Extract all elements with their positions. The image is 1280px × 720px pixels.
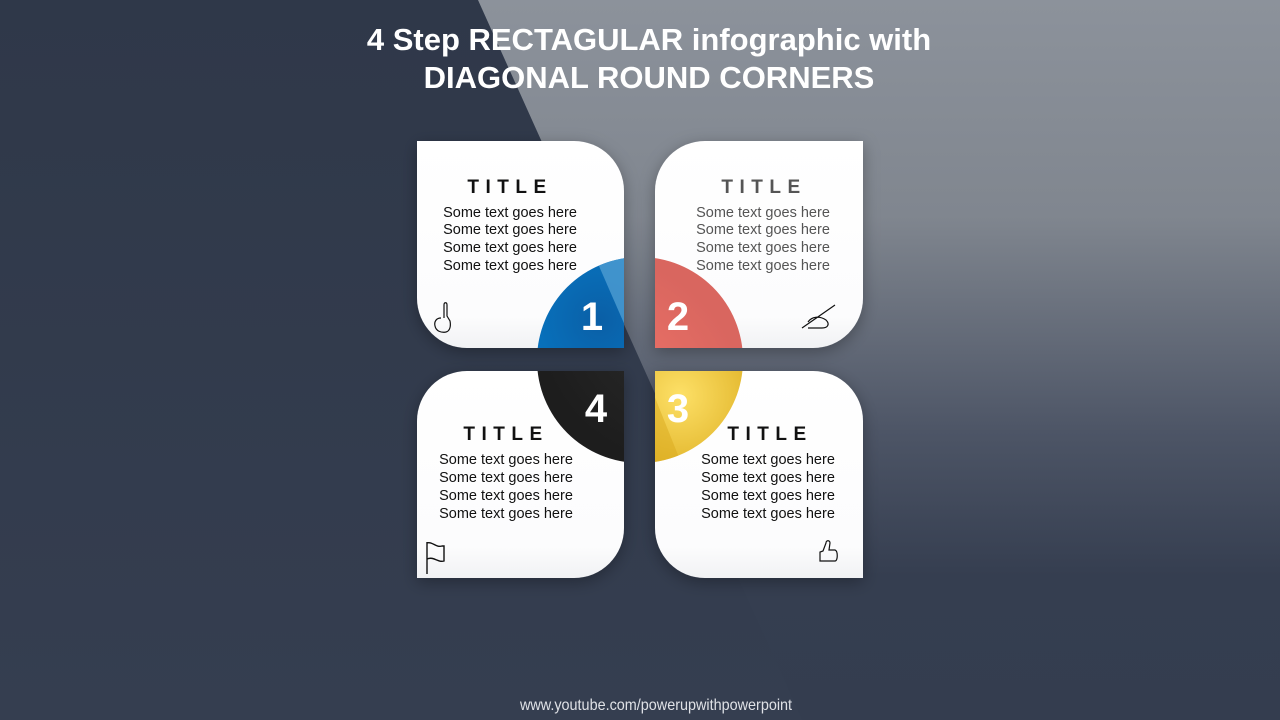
text 2 bbox=[696, 205, 830, 274]
footer url: www.youtube.com/powerupwithpowerpoint bbox=[519, 696, 793, 714]
circle segment 3 bbox=[655, 371, 742, 462]
panel 2 bbox=[648, 138, 870, 358]
text 4: Some text goes here bbox=[439, 470, 573, 486]
text 2: Some text goes here bbox=[696, 258, 830, 274]
text 3: Some text goes here bbox=[701, 488, 835, 504]
text 4 bbox=[439, 452, 573, 522]
text 3: Some text goes here bbox=[701, 452, 835, 468]
text 1 bbox=[443, 205, 577, 274]
title 2: TITLE bbox=[721, 177, 807, 198]
circle segment 4 bbox=[538, 371, 624, 462]
panel 3 bbox=[640, 360, 863, 578]
text 4: Some text goes here bbox=[439, 506, 573, 522]
text 1: Some text goes here bbox=[443, 258, 577, 274]
title: DIAGONAL ROUND CORNERS bbox=[424, 60, 874, 95]
circle segment 2 bbox=[655, 258, 742, 348]
number 2: 2 bbox=[667, 295, 689, 339]
title 3: TITLE bbox=[727, 424, 813, 445]
title bbox=[367, 22, 931, 95]
text 3: Some text goes here bbox=[701, 470, 835, 486]
icon: pointing hand bbox=[435, 303, 450, 332]
text 3: Some text goes here bbox=[701, 506, 835, 522]
panel 4 bbox=[414, 371, 627, 585]
title: 4 Step RECTAGULAR infographic with bbox=[367, 22, 931, 57]
icon: thumbs up bbox=[820, 541, 837, 561]
text 4: Some text goes here bbox=[439, 452, 573, 468]
number 3: 3 bbox=[667, 387, 689, 431]
circle segment 1 bbox=[538, 258, 624, 348]
title 4: TITLE bbox=[463, 424, 549, 445]
text 1: Some text goes here bbox=[443, 205, 577, 221]
text 2: Some text goes here bbox=[696, 205, 830, 221]
title 1: TITLE bbox=[467, 177, 553, 198]
icon: flag bbox=[427, 542, 444, 574]
text 1: Some text goes here bbox=[443, 222, 577, 238]
number 1: 1 bbox=[581, 295, 603, 339]
text 4: Some text goes here bbox=[439, 488, 573, 504]
icon: writing hand bbox=[802, 305, 835, 328]
panel 1 bbox=[417, 141, 640, 360]
text 1: Some text goes here bbox=[443, 240, 577, 256]
text 2: Some text goes here bbox=[696, 240, 830, 256]
text 2: Some text goes here bbox=[696, 222, 830, 238]
text 3 bbox=[701, 452, 835, 522]
number 4: 4 bbox=[585, 387, 608, 431]
